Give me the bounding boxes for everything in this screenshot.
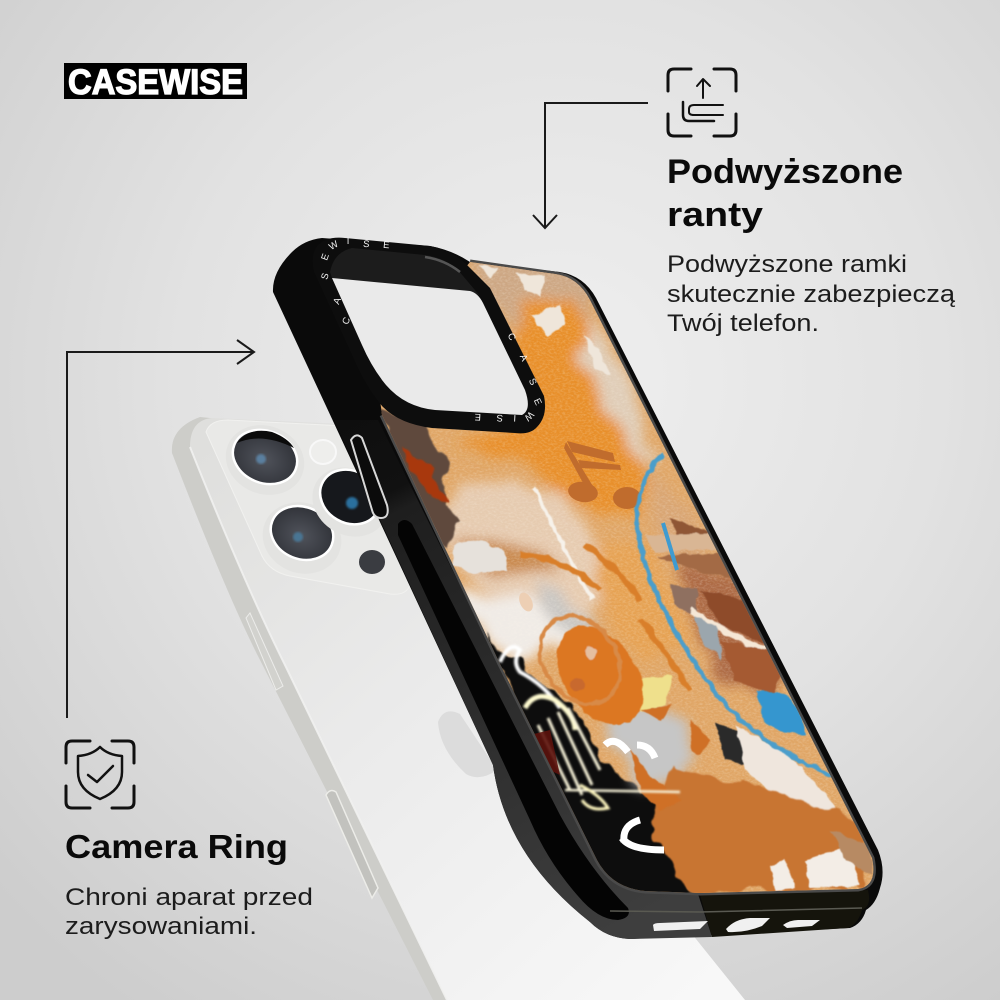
heading: raised edges: Podwyższone — [667, 153, 903, 191]
ring brand text right: S — [496, 412, 503, 423]
dark red patch — [534, 730, 560, 775]
text: camera ring — [65, 884, 313, 940]
apple logo — [438, 711, 497, 777]
arrow: top — [533, 103, 648, 228]
pale top splashes — [478, 264, 610, 375]
lidar — [359, 550, 385, 574]
port right — [783, 920, 820, 928]
upper beige — [468, 262, 593, 335]
port left — [653, 921, 708, 931]
heading: raised edges — [667, 153, 903, 234]
ring brand text right: W — [522, 409, 536, 423]
grey wash — [605, 690, 700, 790]
phone case — [273, 236, 890, 939]
light side ridge — [190, 447, 447, 1000]
ring outer — [313, 238, 545, 433]
case artwork — [370, 250, 890, 905]
text: raised edges: skutecznie zabezpieczą — [667, 281, 956, 308]
port centre — [726, 918, 770, 932]
ring brand text right: A — [517, 353, 530, 364]
lower central beige — [430, 480, 620, 610]
pale ellipse — [519, 592, 533, 612]
bottom edge highlight — [610, 908, 862, 912]
left dusty white band — [450, 590, 590, 660]
ring brand text right: E — [474, 411, 481, 422]
ring brand text right — [474, 332, 544, 423]
yellow patch — [640, 674, 673, 712]
blue arc — [637, 455, 832, 775]
sheet music — [500, 647, 680, 809]
camera ring — [313, 236, 545, 433]
ring brand text left: S — [363, 239, 370, 250]
logo: CASEWISE — [68, 63, 243, 102]
white phone — [172, 413, 745, 1000]
phone side edge — [172, 417, 470, 1000]
text: camera ring: zarysowaniami. — [65, 913, 257, 940]
ring brand text left — [319, 236, 390, 326]
orange splatter — [630, 705, 710, 810]
ring brand text left: C — [340, 316, 353, 326]
text: raised edges: Twój telefon. — [667, 310, 819, 337]
heading: camera ring: Camera Ring — [65, 828, 288, 865]
bottom wall right — [700, 890, 869, 937]
rust right — [680, 560, 790, 695]
text: camera ring: Chroni aparat przed — [65, 884, 313, 911]
black smudge — [716, 722, 745, 765]
ring hole — [332, 278, 528, 415]
right beige — [642, 473, 708, 556]
icon: raised edges — [668, 69, 736, 136]
red flecks — [402, 445, 445, 500]
ring brand text left: A — [331, 295, 344, 306]
pale grey swirl — [452, 541, 507, 572]
lower right bands — [645, 517, 790, 695]
lens 3 — [300, 454, 400, 550]
white curls — [605, 741, 664, 850]
grey dust — [536, 582, 602, 634]
orange middle lower — [590, 540, 690, 670]
art base — [370, 255, 890, 905]
rust and grey corner — [376, 410, 462, 545]
ring highlight — [425, 257, 460, 272]
translucent side wall — [334, 420, 712, 939]
icon: shield — [66, 741, 134, 808]
orange band — [450, 540, 560, 575]
music note — [564, 441, 641, 509]
lens 2 — [252, 491, 352, 585]
volume button — [246, 613, 283, 690]
white streak — [534, 488, 592, 600]
right top pale wash — [580, 310, 660, 460]
ring brand text left: E — [383, 240, 390, 251]
black lower left — [488, 630, 690, 900]
ring brand text left: S — [319, 272, 332, 281]
white lower wash — [735, 725, 865, 840]
ring hole inner wall — [330, 248, 480, 296]
main orange wash — [450, 300, 650, 520]
phone back — [190, 418, 745, 1000]
camera plateau — [206, 420, 410, 594]
text: raised edges: Podwyższone ramki — [667, 251, 907, 278]
blue short stroke — [663, 523, 677, 570]
black side recess — [398, 520, 629, 920]
ring brand text right: C — [505, 332, 518, 342]
ring brand text left: W — [327, 239, 340, 253]
lens 1 — [215, 413, 315, 507]
orange brush streaks — [520, 545, 690, 690]
side button — [351, 435, 388, 518]
orange palette blob — [537, 612, 644, 726]
blue blob — [756, 691, 806, 735]
bottom white patches — [770, 845, 860, 890]
text: raised edges — [667, 251, 956, 337]
ring brand text left: E — [319, 252, 332, 262]
ring brand text left: I — [347, 236, 349, 247]
bottom right brown wash — [830, 830, 872, 875]
ring brand text right: S — [526, 377, 539, 387]
art rim — [382, 262, 873, 893]
flash — [310, 440, 336, 464]
paint grain — [370, 255, 890, 905]
heading: raised edges: ranty — [667, 196, 763, 234]
ring brand text right: E — [531, 397, 544, 407]
ring brand text right: I — [513, 412, 516, 423]
arrow: left — [67, 340, 254, 718]
case outer body — [273, 238, 883, 939]
bottom orange — [650, 770, 868, 895]
action button — [326, 791, 378, 898]
